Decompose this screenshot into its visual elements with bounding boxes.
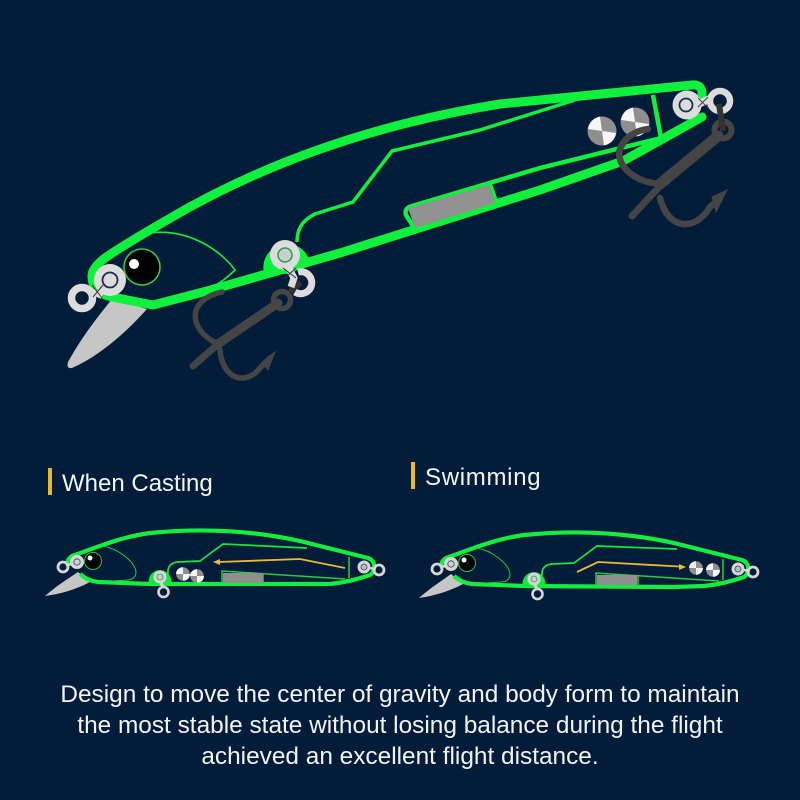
heading: when casting: When Casting: [62, 470, 213, 497]
chamber line: [542, 546, 677, 576]
ballast plate: [408, 185, 495, 228]
belly treble hook: [193, 284, 298, 378]
small lure: swimming: [419, 532, 758, 599]
eye: [84, 552, 102, 570]
description text: Design to move the center of gravity and body form to maintain: [60, 681, 740, 708]
ballast chamber: [406, 95, 661, 229]
ballast plate: [223, 573, 263, 583]
arrow: [213, 559, 345, 568]
ballast chamber: [596, 559, 723, 586]
belly eyelet rings: [270, 240, 312, 294]
head line: [476, 548, 510, 583]
eye: [124, 249, 160, 285]
internal chamber line: [297, 100, 575, 242]
nose rings: [58, 555, 84, 572]
weights: [176, 567, 204, 583]
belly mount and ring: [522, 572, 546, 599]
nose eyelet rings: [72, 264, 126, 308]
head line: [102, 546, 136, 581]
small lure: when casting: [45, 530, 384, 597]
lip: [419, 574, 463, 598]
body outline: [68, 530, 374, 584]
tail rings: [732, 562, 758, 577]
eye: [458, 554, 476, 572]
nose rings: [432, 557, 458, 574]
tail treble hook: [619, 122, 732, 224]
arrow: [577, 562, 686, 572]
tail eyelet rings: [672, 90, 730, 131]
lure body outline: [92, 85, 702, 305]
description text: the most stable state without losing balance during the flight: [77, 712, 723, 739]
description text: achieved an excellent flight distance.: [201, 743, 599, 770]
sliding weights: [588, 108, 650, 146]
lure lip: [68, 299, 147, 368]
main lure illustration: [68, 85, 732, 378]
tail rings: [358, 560, 384, 575]
body outline: [442, 532, 748, 587]
heading: swimming: Swimming: [425, 464, 541, 491]
head line: [150, 232, 235, 290]
lip: [45, 572, 90, 596]
weights: [689, 561, 720, 577]
belly mount and ring: [148, 570, 172, 597]
chamber line: [168, 544, 307, 574]
ballast chamber: [222, 557, 349, 584]
ballast plate: [597, 575, 637, 585]
belly hook mount: [263, 244, 310, 274]
description text: [60, 681, 740, 770]
